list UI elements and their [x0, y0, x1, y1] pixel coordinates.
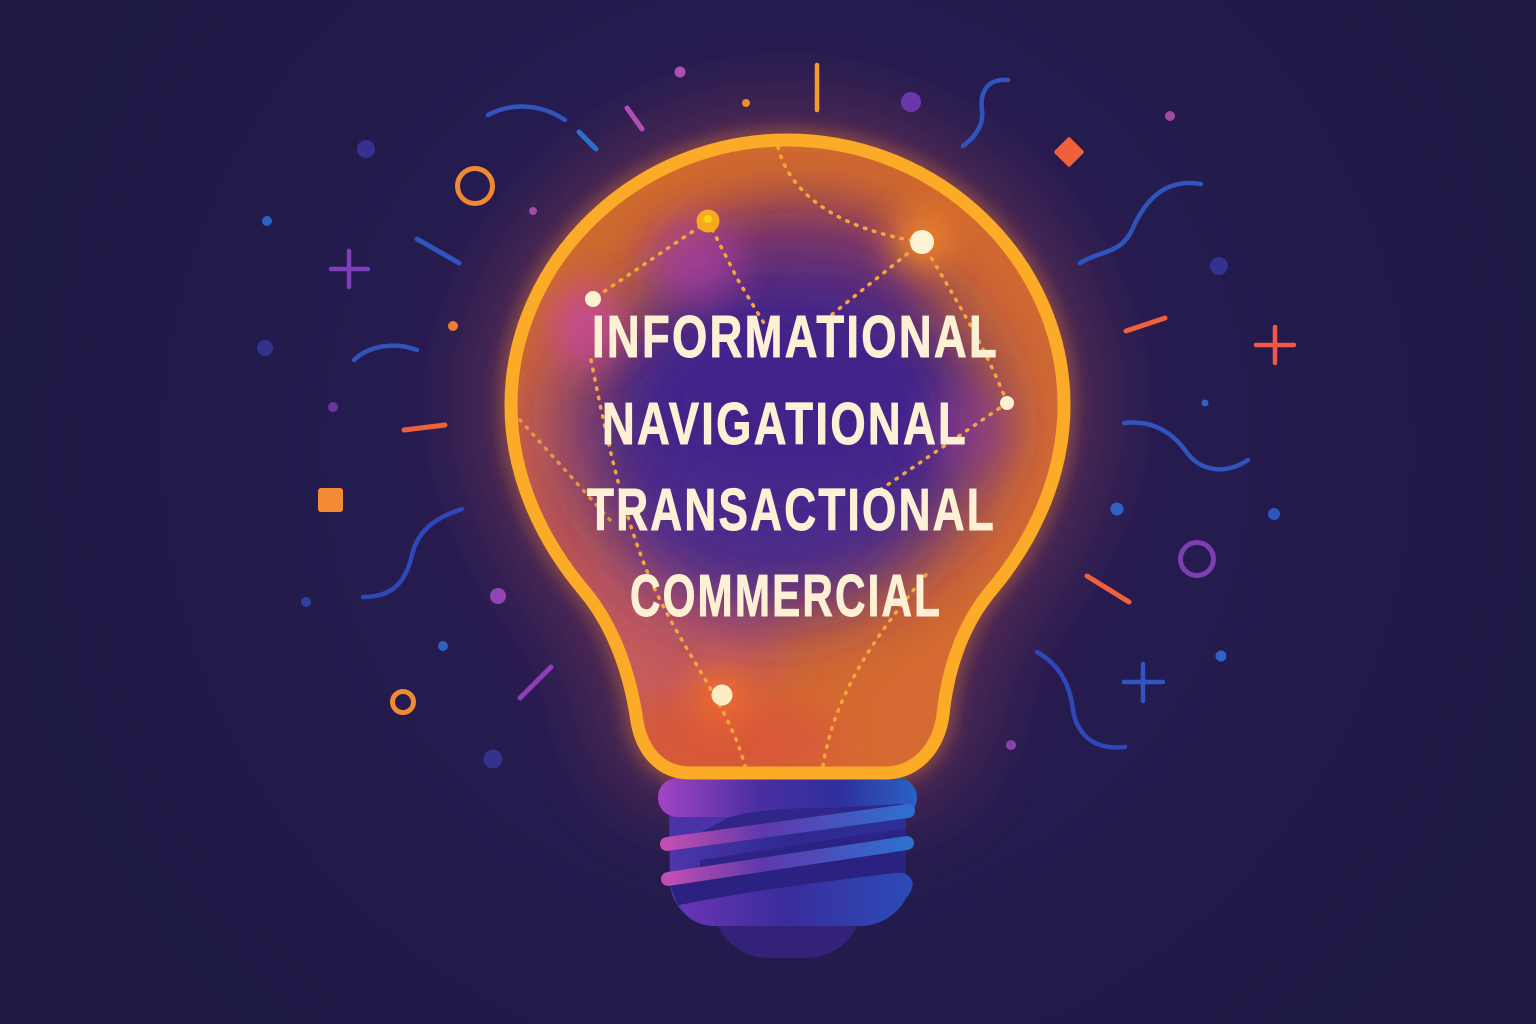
- bulb outline: [511, 140, 1064, 773]
- constellation nodes: [585, 210, 1014, 706]
- glass: maroon upper haze: [670, 200, 930, 360]
- glass: pink haze bottom: [560, 510, 780, 730]
- label: informational: INFORMATIONAL: [592, 304, 999, 370]
- glass: purple core: [580, 260, 990, 580]
- base: lower section: [680, 873, 913, 926]
- infographic: lightbulb of search intent types: [257, 40, 1296, 958]
- confetti: right dots: [1006, 257, 1280, 750]
- glass: magenta glow: [647, 218, 743, 302]
- glass: red haze bottom: [642, 691, 835, 766]
- confetti: left side: [331, 107, 642, 713]
- glass: pink haze left: [518, 348, 605, 573]
- base: body: [669, 805, 906, 926]
- confetti: left dots: [257, 140, 537, 768]
- base: bottom contact: [715, 920, 860, 958]
- glass: node glows: [892, 212, 952, 272]
- bulb glass interior: [518, 146, 1058, 766]
- base: dark groove between threads: [700, 828, 906, 890]
- base: shadow under cap: [670, 804, 906, 840]
- confetti: right side: [1037, 183, 1294, 748]
- base: thread one: [667, 811, 908, 844]
- label: transactional: TRANSACTIONAL: [587, 477, 996, 543]
- dotted constellation lines: [520, 147, 1007, 766]
- label: navigational: NAVIGATIONAL: [602, 391, 968, 457]
- bulb outer glow: [511, 140, 1064, 773]
- base: dark groove below threads: [670, 850, 906, 905]
- heading: four search intent types: [587, 304, 999, 629]
- confetti: top: [674, 65, 1175, 168]
- bulb base and screw threads: [658, 778, 917, 958]
- label: commercial: COMMERCIAL: [630, 563, 942, 629]
- base: thread two: [668, 843, 907, 879]
- base: top cap: [658, 778, 917, 817]
